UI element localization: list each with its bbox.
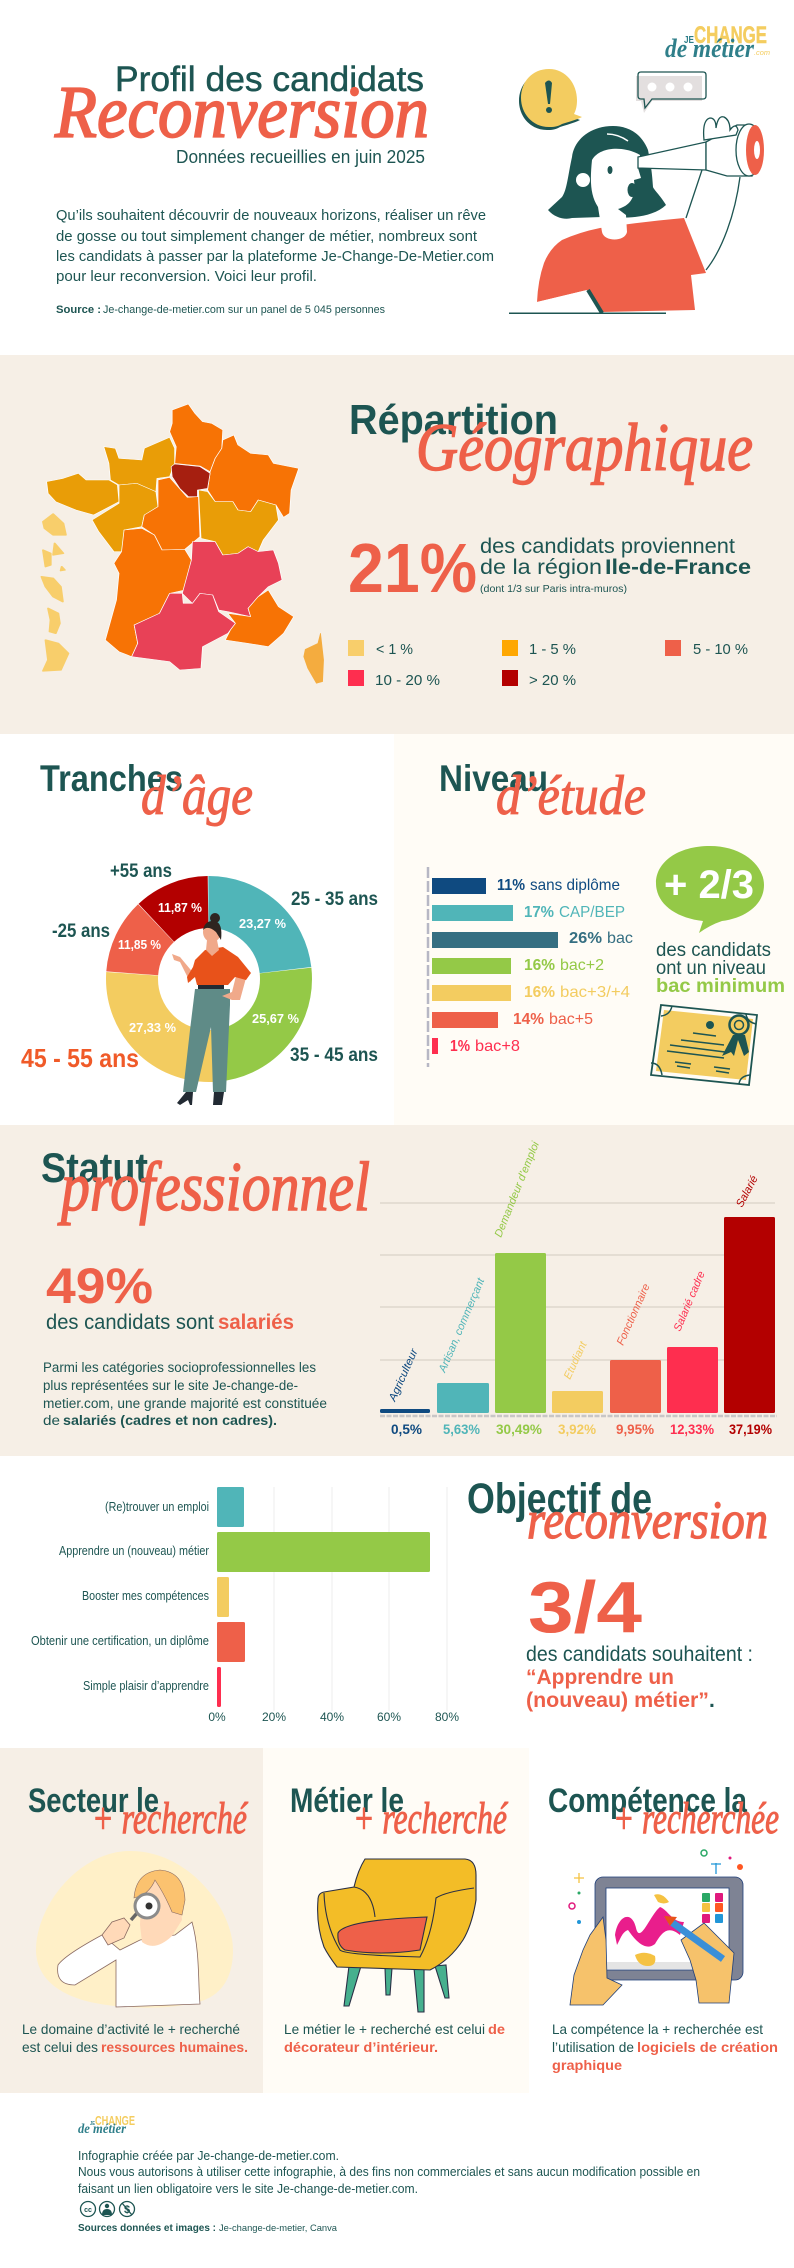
stat: 3/4: 3/4	[528, 1568, 642, 1648]
panel: most sought sector	[0, 1748, 263, 2093]
bar chart: goals	[217, 1487, 430, 1707]
sources line: Sources données et images :	[78, 2222, 216, 2234]
icon: speech bubble	[636, 72, 706, 113]
heading: Compétence la + recherchée	[548, 1782, 779, 1843]
paragraph: metier.com, une grande majorité est constituée	[43, 1396, 327, 1411]
slice values: 11,87 %	[158, 900, 202, 915]
rotated category labels	[386, 1140, 761, 1404]
panel: reconversion goal	[31, 1475, 768, 1724]
intro paragraph: de gosse ou tout simplement changer de métier, nombreux sont	[56, 228, 478, 245]
bar values: 37,19%	[729, 1422, 772, 1437]
bar chart: status	[380, 1217, 775, 1413]
panel: age groups	[21, 758, 378, 1105]
bar values: 12,33%	[670, 1422, 714, 1437]
slice labels: -25 ans	[52, 921, 110, 942]
title script: Reconversion: Reconversion	[54, 72, 429, 154]
bar labels: Obtenir une certification, un diplôme	[31, 1634, 209, 1648]
heading: Objectif de reconversion	[467, 1475, 768, 1550]
bar chart: education: bac	[607, 930, 633, 947]
bar labels: Apprendre un (nouveau) métier	[59, 1544, 209, 1558]
icons: creative commons: $	[124, 2204, 130, 2216]
rotated category labels: Etudiant	[562, 1339, 590, 1381]
credits: faisant un lien obligatoire vers le site Je-change-de-metier.com.	[78, 2182, 418, 2196]
axis labels: 20%	[262, 1710, 286, 1724]
text: sector	[22, 2021, 248, 2055]
text: job: décorateur d’intérieur.	[284, 2039, 438, 2055]
logo: footer: de métier	[78, 2122, 126, 2137]
stat: 21%: 21%	[348, 529, 477, 607]
bar values	[391, 1422, 772, 1437]
legend	[348, 640, 748, 689]
illustration: woman with binoculars	[509, 69, 764, 314]
stat description: .	[709, 1689, 715, 1712]
source line: Je-change-de-metier.com sur un panel de 5 045 personnes	[103, 304, 385, 316]
bar chart: education: bac+2	[560, 957, 604, 974]
rotated category labels: Demandeur d’emploi	[493, 1140, 542, 1239]
axis labels: 60%	[377, 1710, 401, 1724]
slice labels: +55 ans	[110, 861, 172, 882]
slice values	[118, 900, 299, 1035]
icon: exclamation bubble	[519, 69, 582, 130]
paragraph: de	[43, 1413, 60, 1428]
text: job	[284, 2021, 505, 2055]
text: skill: La compétence la + recherchée est	[552, 2021, 763, 2037]
axis labels	[208, 1710, 459, 1724]
text: job: de	[488, 2021, 505, 2037]
heading: Tranches d'âge: d’âge	[141, 765, 253, 827]
text: skill: graphique	[552, 2057, 622, 2073]
rotated category labels: Artisan, commerçant	[436, 1276, 488, 1375]
heading: Secteur le + recherché: Secteur le	[28, 1782, 159, 1820]
heading: Secteur le + recherché	[28, 1782, 249, 1843]
title: Profil des candidats: Profil des candidats	[115, 60, 424, 99]
bar chart: education: bac+8	[475, 1038, 520, 1055]
panel: most sought skill	[548, 1782, 779, 2073]
stat description: “Apprendre un	[526, 1666, 674, 1689]
panel: header	[54, 22, 770, 316]
icons: creative commons: cc	[84, 2207, 92, 2214]
bar labels: Simple plaisir d’apprendre	[83, 1679, 209, 1693]
illustration: tablet with hands	[569, 1850, 743, 2005]
stat description: Ile-de-France	[605, 556, 751, 579]
panel: most sought job	[263, 1748, 529, 2093]
panel: professional status	[0, 1125, 794, 1456]
slice labels: 35 - 45 ans	[290, 1045, 378, 1066]
slice labels: 45 - 55 ans	[21, 1043, 139, 1073]
text: skill	[552, 2021, 778, 2073]
illustration: armchair	[318, 1859, 476, 2012]
heading: Objectif de reconversion: Objectif de	[467, 1475, 652, 1523]
bar labels	[31, 1500, 209, 1693]
heading: Niveau d'étude: d’étude	[496, 765, 646, 827]
slice values: 11,85 %	[118, 937, 161, 952]
callout: + 2/3	[656, 846, 764, 933]
bar values: 30,49%	[496, 1422, 542, 1437]
heading: Statut professionnel: Statut	[41, 1144, 148, 1191]
axis labels: 0%	[208, 1710, 226, 1724]
text: sector: Le domaine d’activité le + recherché	[22, 2021, 240, 2037]
legend: 1 - 5 %	[529, 641, 576, 658]
bar chart: education: bac+5	[549, 1011, 593, 1028]
icons: creative commons	[80, 2202, 134, 2216]
logo: footer: CHANGE	[95, 2113, 135, 2128]
sources line: Je-change-de-metier, Canva	[219, 2223, 338, 2234]
bar chart: education	[432, 877, 633, 1055]
credits	[78, 2149, 700, 2196]
source line: Source :	[56, 304, 101, 316]
bar chart: education: 11%	[497, 877, 525, 894]
heading: Métier le + recherché: Métier le	[290, 1782, 404, 1820]
stat description: (nouveau) métier”	[526, 1689, 709, 1712]
bar values: 9,95%	[616, 1422, 654, 1437]
heading: Compétence la + recherchée: Compétence la	[548, 1782, 748, 1820]
slice values: 25,67 %	[252, 1011, 299, 1026]
logo: Je Change de metier: JE	[684, 35, 694, 46]
intro paragraph: pour leur reconversion. Voici leur profil.	[56, 268, 317, 285]
bar chart: education: 16%	[524, 984, 555, 1001]
stat description: des candidats souhaitent :	[526, 1643, 753, 1666]
heading: Métier le + recherché	[290, 1782, 509, 1843]
slice values: 23,27 %	[239, 916, 286, 931]
heading: Statut professionnel: professionnel	[57, 1149, 370, 1226]
rotated category labels: Salarié	[734, 1174, 761, 1209]
logo: Je Change de metier: de métier	[665, 34, 755, 63]
heading: Secteur le + recherché: + recherché	[92, 1794, 249, 1843]
callout text: bac minimum	[656, 976, 785, 997]
illustration: standing woman	[172, 913, 251, 1105]
credits: Infographie créée par Je-change-de-metier.com.	[78, 2149, 339, 2163]
legend: > 20 %	[529, 672, 576, 689]
legend: 10 - 20 %	[375, 672, 440, 689]
bar chart: education: 26%	[569, 930, 602, 947]
heading: Répartition Géographique: Répartition	[349, 396, 558, 443]
slice labels: 25 - 35 ans	[291, 889, 378, 910]
text: sector: est celui des	[22, 2039, 98, 2055]
map of France	[42, 404, 324, 683]
heading: Tranches d'âge	[40, 758, 253, 827]
bar chart: education: 17%	[524, 904, 554, 921]
callout text	[656, 940, 785, 997]
stat description: de la région	[480, 556, 602, 579]
intro paragraph: les candidats à passer par la plateforme Je-Change-De-Metier.com	[56, 248, 494, 265]
text: sector: ressources humaines.	[101, 2039, 248, 2055]
logo: footer: JE	[90, 2121, 96, 2127]
subtitle: Données recueillies en juin 2025	[176, 147, 425, 167]
bar values: 5,63%	[443, 1422, 480, 1437]
text: job: Le métier le + recherché est celui	[284, 2021, 485, 2037]
panel: footer	[78, 2113, 700, 2234]
slice values: 27,33 %	[129, 1020, 176, 1035]
donut chart	[132, 902, 286, 1056]
paragraph	[43, 1360, 327, 1428]
bar chart: education: CAP/BEP	[559, 904, 625, 921]
legend: 5 - 10 %	[693, 641, 748, 658]
bar values: 0,5%	[391, 1422, 422, 1437]
heading: Métier le + recherché: + recherché	[353, 1794, 509, 1843]
rotated category labels: Salarié cadre	[672, 1270, 708, 1333]
paragraph: Parmi les catégories socioprofessionnelles les	[43, 1360, 316, 1375]
stat description	[480, 535, 751, 595]
logo: Je Change de metier	[665, 22, 770, 63]
text: skill: logiciels de création	[637, 2039, 778, 2055]
rotated category labels: Fonctionnaire	[615, 1282, 653, 1347]
sources line	[78, 2222, 338, 2234]
heading: Niveau d'étude: Niveau	[439, 758, 548, 799]
axis labels: 40%	[320, 1710, 344, 1724]
logo: Je Change de metier: .com	[754, 50, 770, 57]
bar labels: (Re)trouver un emploi	[105, 1500, 209, 1514]
illustration: person with magnifying glass	[36, 1851, 233, 2008]
rotated category labels: Agriculteur	[386, 1346, 421, 1404]
paragraph: plus représentées sur le site Je-change-de-	[43, 1378, 298, 1393]
icon: diploma	[651, 1005, 757, 1085]
intro paragraph: Qu’ils souhaitent découvrir de nouveaux horizons, réaliser un rêve	[56, 207, 486, 224]
bar chart: education: 16%	[524, 957, 555, 974]
stat description: des candidats proviennent	[480, 535, 735, 558]
paragraph: salariés (cadres et non cadres).	[63, 1413, 277, 1428]
bar chart: education: 14%	[513, 1011, 544, 1028]
bar values: 3,92%	[558, 1422, 596, 1437]
bar chart: education: 1%	[450, 1038, 470, 1055]
callout: + 2/3: + 2/3	[664, 863, 754, 907]
panel: geographic distribution	[0, 355, 794, 734]
text: skill: l’utilisation de	[552, 2039, 634, 2055]
intro paragraph	[56, 207, 494, 285]
stat: 49%: 49%	[46, 1258, 153, 1314]
stat description: salariés	[218, 1311, 294, 1334]
stat description: des candidats sont	[46, 1311, 214, 1334]
callout text: des candidats	[656, 940, 771, 961]
legend: < 1 %	[376, 641, 413, 658]
stat description: (dont 1/3 sur Paris intra-muros)	[480, 583, 627, 595]
heading: Répartition Géographique	[349, 396, 753, 485]
bar chart: education: bac+3/+4	[560, 984, 630, 1001]
heading: Niveau d'étude	[439, 758, 646, 827]
credits: Nous vous autorisons à utiliser cette infographie, à des fins non commerciales et sans aucun modification possible en	[78, 2165, 700, 2179]
bar labels: Booster mes compétences	[82, 1589, 209, 1603]
heading: Tranches d'âge: Tranches	[40, 758, 183, 799]
axis labels: 80%	[435, 1710, 459, 1724]
callout text: ont un niveau	[656, 958, 766, 979]
bar chart: education: sans diplôme	[530, 877, 620, 894]
slice labels	[21, 861, 378, 1073]
logo: footer	[78, 2113, 135, 2137]
stat description	[526, 1643, 753, 1712]
panel: education level	[394, 734, 794, 1125]
